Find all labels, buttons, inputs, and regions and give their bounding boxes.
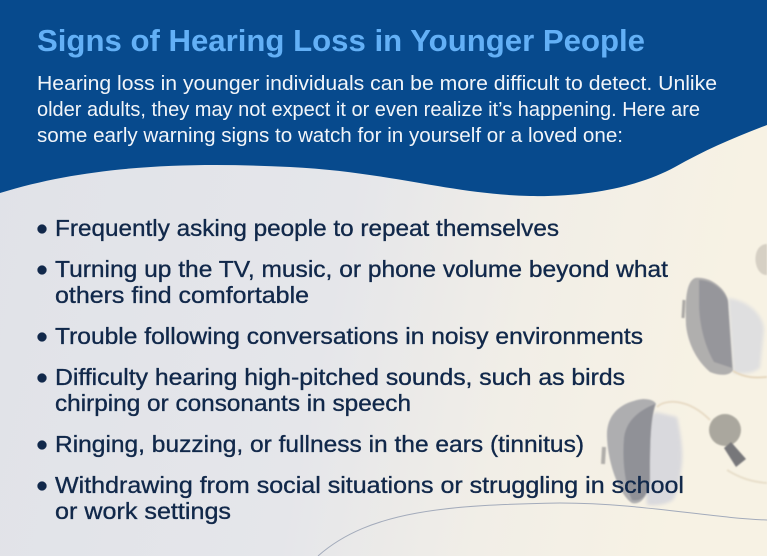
bullet: volume: others find comfortable	[55, 282, 309, 308]
intro paragraph: some early warning signs to watch for in yourself or a loved one:	[37, 125, 623, 147]
bullet: volume	[38, 256, 669, 308]
bullet: high-pitched sounds	[38, 364, 625, 416]
icon: partial ear tip top right	[755, 244, 767, 275]
bullet list	[38, 215, 684, 524]
bullet: high-pitched sounds: Difficulty hearing high-pitched sounds, such as birds	[55, 364, 625, 390]
bullet: repeat: Frequently asking people to repeat themselves	[55, 215, 559, 241]
intro paragraph: older adults, they may not expect it or even realize it’s happening. Here are	[37, 99, 700, 121]
bullet: withdrawing: Withdrawing from social situations or struggling in school	[55, 472, 684, 498]
icon: lower hearing aid	[603, 399, 767, 505]
header banner	[0, 0, 767, 196]
bullet: volume: Turning up the TV, music, or phone volume beyond what	[55, 256, 669, 282]
intro paragraph	[37, 73, 717, 147]
bullet: tinnitus: Ringing, buzzing, or fullness in the ears (tinnitus)	[55, 431, 584, 457]
title: Signs of Hearing Loss in Younger People	[37, 23, 645, 58]
bullet: withdrawing: or work settings	[55, 498, 231, 524]
bullet: withdrawing	[38, 472, 684, 524]
thin decorative curve	[318, 503, 767, 556]
bullet: high-pitched sounds: chirping or consonants in speech	[55, 390, 411, 416]
intro paragraph: Hearing loss in younger individuals can be more difficult to detect. Unlike	[37, 73, 717, 95]
image: hearing aids	[603, 244, 767, 505]
icon: upper hearing aid	[683, 278, 767, 377]
bullet: conversations: Trouble following conversations in noisy environments	[55, 323, 643, 349]
